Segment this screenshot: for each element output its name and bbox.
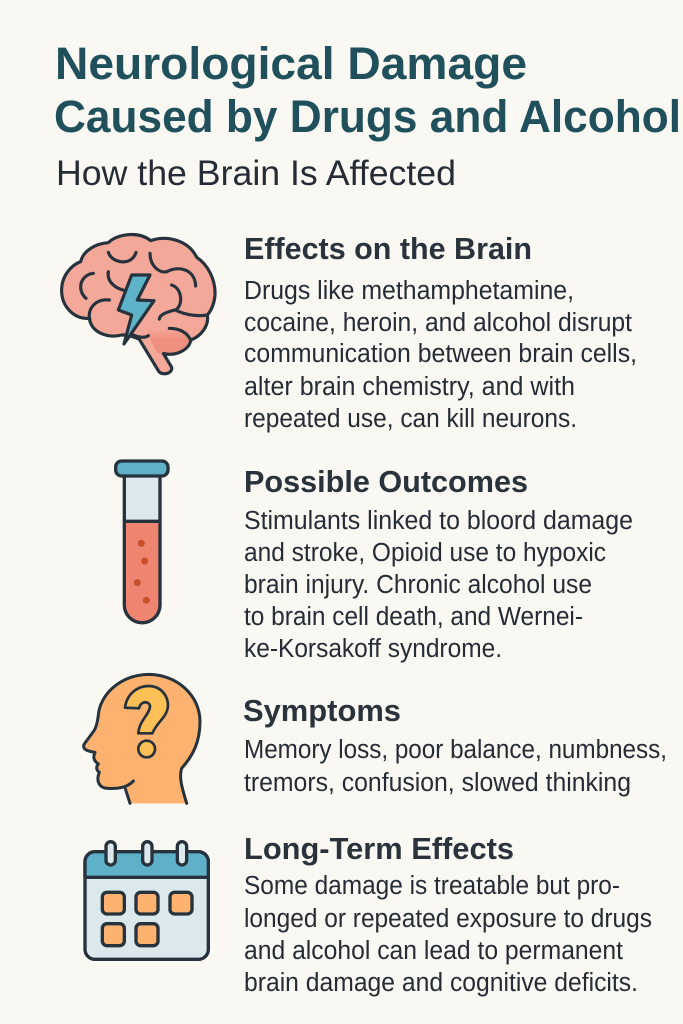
- text block: symptoms: tremors, confusion, slowed thinking: [244, 769, 631, 797]
- text block: symptoms: [244, 736, 667, 797]
- heading: long-term effects: Long-Term Effects: [244, 831, 514, 866]
- text block: long-term effects: brain damage and cognitive deficits.: [244, 969, 638, 997]
- text block: effects on the brain: cocaine, heroin, and alcohol disrupt: [244, 309, 632, 337]
- text block: long-term effects: Some damage is treatable but pro-: [244, 872, 620, 900]
- text block: effects on the brain: Drugs like methamphetamine,: [244, 277, 574, 305]
- text block: symptoms: Memory loss, poor balance, numbness,: [244, 736, 667, 764]
- text block: possible outcomes: and stroke, Opioid use to hypoxic: [244, 539, 606, 567]
- icon: head with question mark: [84, 674, 200, 803]
- title: Neurological Damage: [55, 38, 527, 89]
- subtitle: How the Brain Is Affected: [56, 154, 456, 193]
- text block: effects on the brain: [244, 277, 637, 433]
- text block: possible outcomes: [244, 507, 633, 663]
- icon: calendar: [85, 842, 208, 959]
- text block: long-term effects: [244, 872, 652, 997]
- text block: long-term effects: and alcohol can lead to permanent: [244, 937, 623, 965]
- text block: effects on the brain: communication between brain cells,: [244, 340, 637, 368]
- text block: possible outcomes: Stimulants linked to bloord damage: [244, 507, 633, 535]
- heading: possible outcomes: Possible Outcomes: [244, 464, 528, 499]
- text block: possible outcomes: brain injury. Chronic alcohol use: [244, 571, 592, 599]
- heading: effects on the brain: Effects on the Brain: [244, 231, 532, 266]
- icon: brain with lightning bolt: [62, 235, 215, 374]
- text block: possible outcomes: to brain cell death, and Wernei-: [244, 603, 583, 631]
- icon: test tube: [116, 461, 168, 623]
- title: Caused by Drugs and Alcohol: [54, 91, 681, 142]
- title: [54, 38, 681, 142]
- text block: effects on the brain: alter brain chemistry, and with: [244, 373, 575, 401]
- text block: possible outcomes: ke-Korsakoff syndrome.: [244, 635, 502, 663]
- text block: long-term effects: longed or repeated exposure to drugs: [244, 905, 652, 933]
- text block: effects on the brain: repeated use, can kill neurons.: [244, 405, 577, 433]
- heading: symptoms: Symptoms: [243, 693, 401, 728]
